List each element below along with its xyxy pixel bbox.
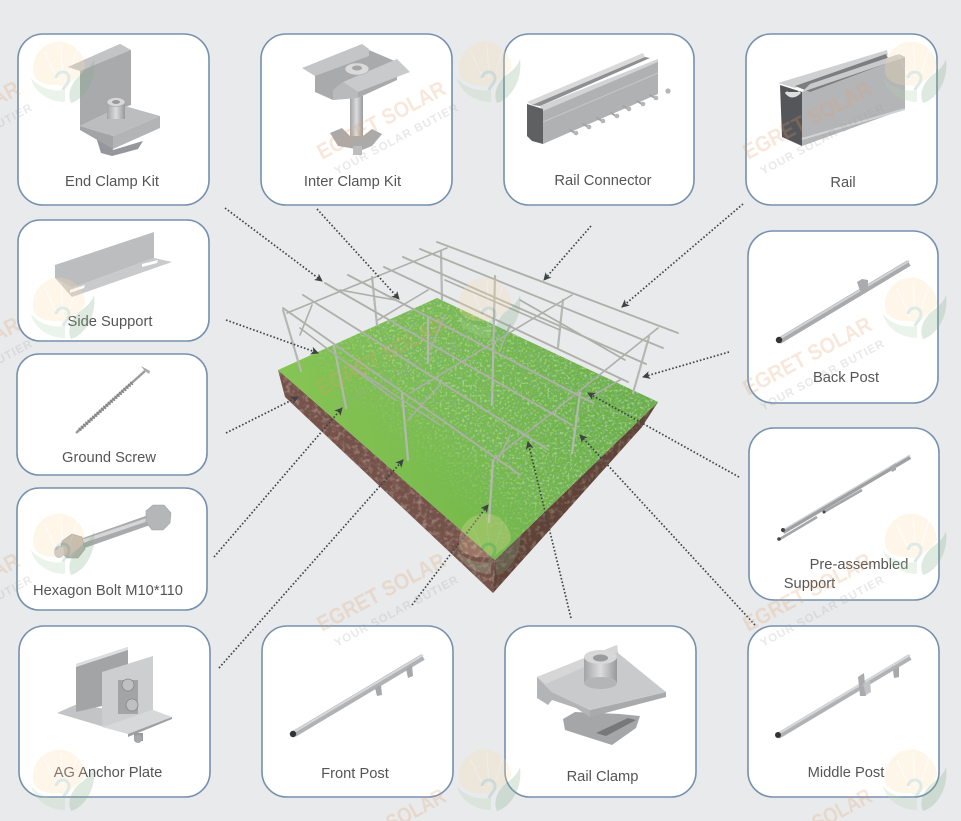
label: End Clamp Kit: End Clamp Kit	[65, 174, 159, 190]
icon: middle post	[775, 655, 910, 738]
panel: AG Anchor Plate	[19, 626, 210, 797]
panel: Ground Screw	[17, 354, 207, 475]
icon: AG anchor plate	[57, 647, 172, 743]
watermark text: YOUR SOLAR BUTIER	[333, 574, 461, 650]
rails	[283, 242, 678, 475]
icon: inter clamp	[302, 44, 410, 155]
watermark text: EGRET SOLAR	[739, 76, 876, 164]
icon: ground screw	[76, 366, 150, 433]
label: Ground Screw: Ground Screw	[62, 450, 156, 466]
label: Rail Connector: Rail Connector	[554, 173, 652, 189]
label: Rail: Rail	[830, 175, 856, 191]
watermark text: YOUR SOLAR BUTIER	[759, 574, 887, 650]
label: Inter Clamp Kit: Inter Clamp Kit	[304, 174, 401, 190]
panel: Side Support	[18, 220, 209, 341]
label: Front Post: Front Post	[321, 766, 389, 782]
label: Back Post: Back Post	[813, 370, 879, 386]
soil: left face	[278, 370, 495, 593]
beams and braces	[287, 248, 658, 462]
label: Rail Clamp: Rail Clamp	[567, 769, 638, 785]
label: Pre-assembled Support: Support	[784, 576, 835, 592]
watermark text: EGRET SOLAR	[739, 312, 876, 400]
dotted leader arrows	[214, 204, 755, 668]
panel: Hexagon Bolt	[17, 488, 207, 610]
icon: front post	[290, 655, 423, 737]
icon: back post	[776, 261, 909, 343]
panel: Rail Clamp	[505, 626, 696, 797]
label: Side Support: Side Support	[68, 314, 152, 330]
icon: pre-assembled support	[777, 455, 910, 541]
panel: End Clamp Kit	[18, 34, 209, 205]
panel: Pre-assembled Support	[749, 428, 939, 600]
label: Middle Post: Middle Post	[808, 765, 884, 781]
icon: rail clamp	[537, 645, 666, 745]
icon: rail	[778, 50, 905, 146]
watermark text: YOUR SOLAR BUTIER	[333, 338, 461, 414]
icon: end clamp	[68, 44, 160, 156]
watermark text: YOUR SOLAR BUTIER	[759, 338, 887, 414]
label: Hexagon Bolt M10*110: Hexagon Bolt M10*110	[33, 583, 183, 599]
label: Pre-assembled Support	[784, 557, 908, 592]
icon: hexagon bolt	[54, 505, 171, 558]
panel: Inter Clamp Kit	[261, 34, 452, 205]
panel: Back Post	[748, 231, 938, 403]
panel: Rail	[746, 34, 937, 205]
panel: Middle Post	[748, 626, 939, 797]
panel: Front Post	[262, 626, 453, 797]
grass: top face	[278, 298, 658, 560]
mounting frame structure	[283, 242, 678, 522]
panel: Rail Connector	[504, 34, 694, 205]
label: Pre-assembled Support: Pre-assembled	[810, 557, 908, 573]
ground block with grass and soil	[278, 298, 658, 593]
label: AG Anchor Plate: AG Anchor Plate	[54, 765, 162, 781]
watermark text: EGRET SOLAR	[739, 548, 876, 636]
watermark text: EGRET SOLAR	[313, 548, 450, 636]
watermark text: YOUR SOLAR BUTIER	[759, 102, 887, 178]
posts	[283, 252, 649, 522]
watermark text: EGRET SOLAR	[313, 312, 450, 400]
icon: rail connector	[527, 53, 671, 144]
watermark text: EGRET SOLAR	[313, 76, 450, 164]
icon: side support	[55, 232, 172, 297]
watermark text: YOUR SOLAR BUTIER	[333, 102, 461, 178]
soil: right face	[493, 402, 658, 593]
